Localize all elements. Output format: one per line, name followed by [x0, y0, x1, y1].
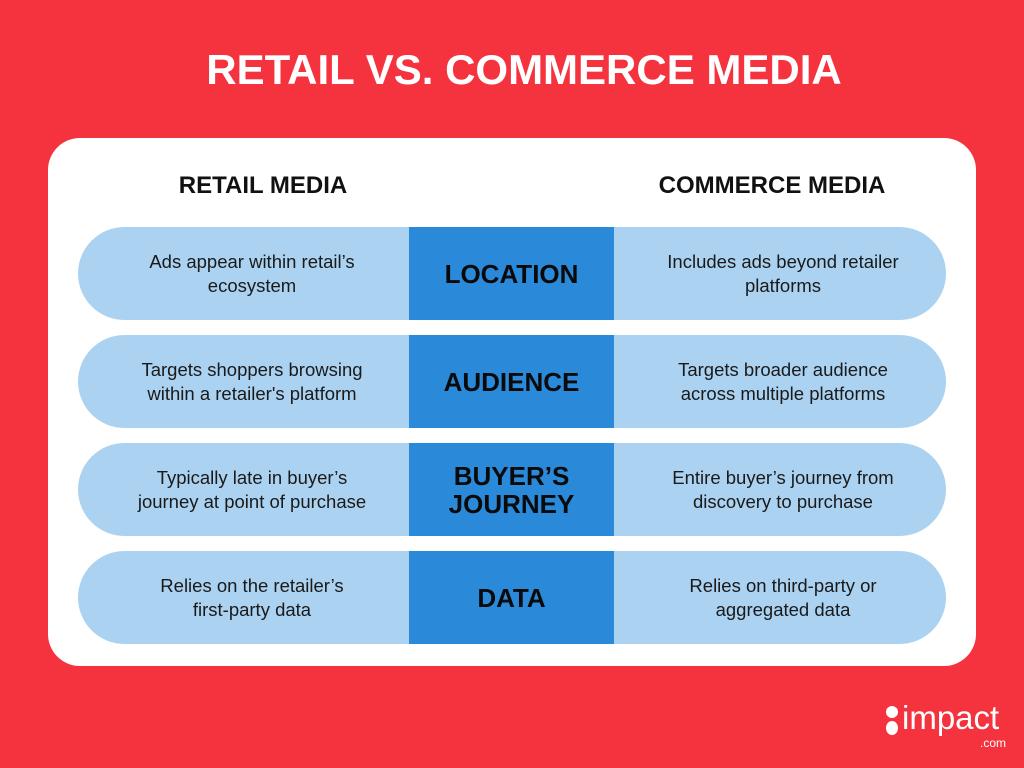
row: location: ecosystem: [208, 274, 296, 296]
title: RETAIL VS. COMMERCE MEDIA: [206, 46, 842, 93]
row: location: [78, 227, 946, 320]
heading: commerce media: COMMERCE MEDIA: [659, 172, 885, 199]
row: buyer's journey: Entire buyer’s journey from: [672, 466, 894, 488]
row: location: LOCATION: [445, 258, 578, 288]
row: data: [78, 551, 946, 644]
row: audience: within a retailer's platform: [147, 382, 357, 404]
row: data: DATA: [477, 582, 546, 612]
heading: retail media: RETAIL MEDIA: [179, 172, 347, 199]
row: audience: Targets shoppers browsing: [141, 358, 363, 380]
row: buyer's journey: JOURNEY: [449, 488, 574, 518]
row: buyer's journey: Typically late in buyer’s: [157, 466, 347, 488]
row: buyer's journey: discovery to purchase: [693, 490, 873, 512]
row: audience: across multiple platforms: [681, 382, 885, 404]
row: data: first-party data: [193, 598, 311, 620]
row: buyer's journey: BUYER’S: [454, 460, 569, 490]
row: buyer's journey: journey at point of purchase: [138, 490, 366, 512]
row: location: Includes ads beyond retailer: [667, 250, 899, 272]
row: buyer's journey: [78, 443, 946, 536]
text: .com: [980, 736, 1006, 750]
logo: impact.com: [886, 699, 1006, 750]
row: audience: [78, 335, 946, 428]
row: audience: AUDIENCE: [444, 366, 579, 396]
panel: comparison card: [48, 138, 976, 666]
row: location: platforms: [745, 274, 821, 296]
row: data: aggregated data: [716, 598, 850, 620]
row: location: Ads appear within retail’s: [149, 250, 355, 272]
row: audience: Targets broader audience: [678, 358, 888, 380]
row: data: Relies on the retailer’s: [160, 574, 344, 596]
row: data: Relies on third-party or: [689, 574, 877, 596]
text: impact: [902, 699, 999, 736]
